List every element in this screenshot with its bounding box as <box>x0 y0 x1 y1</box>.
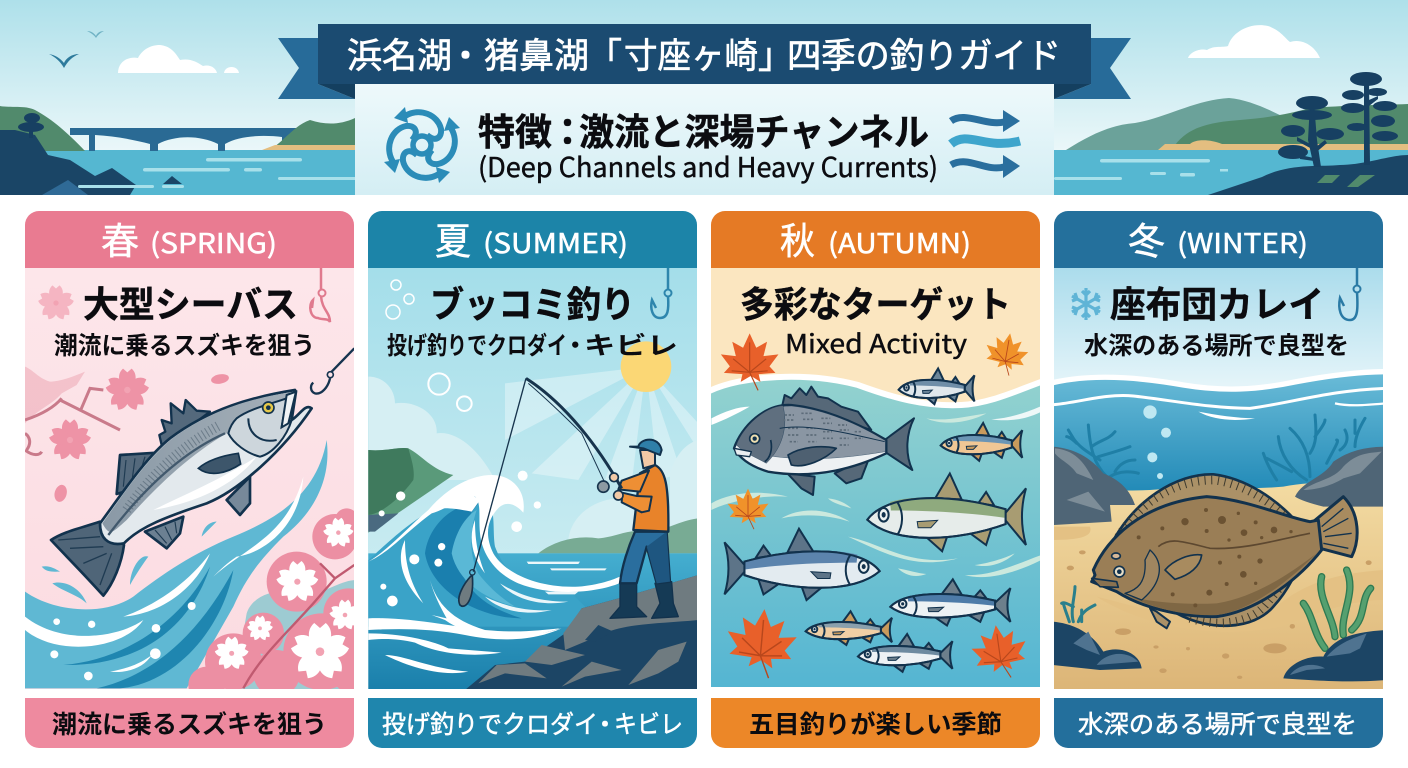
autumn footer <box>711 698 1040 748</box>
angler <box>610 440 678 618</box>
rock shore <box>465 575 698 690</box>
rock islet <box>163 176 182 184</box>
spring hook <box>310 268 330 322</box>
spring subtitle: 潮流に乗るスズキを狙う <box>54 327 315 362</box>
ribbon face <box>318 24 1091 84</box>
summer header: (SUMMER) <box>483 222 628 261</box>
autumn header: 秋 <box>780 211 815 265</box>
sand pebbles <box>1067 550 1372 679</box>
autumn water <box>708 377 1045 690</box>
ribbon tail right <box>1054 38 1131 99</box>
spring header: (SPRING) <box>150 222 277 261</box>
spring footer: 潮流に乗るスズキを狙う <box>52 705 327 741</box>
sand right <box>1158 140 1408 150</box>
winter water <box>1050 372 1387 497</box>
summer subtitle: ・ <box>563 327 588 362</box>
panel: summer <box>368 211 698 748</box>
sky <box>0 0 1408 150</box>
cloud right <box>1188 25 1320 58</box>
title text: 猪鼻湖 <box>484 28 589 79</box>
winter subtitle: 水深のある場所で良型を <box>1084 327 1349 362</box>
cloud left <box>118 45 239 73</box>
summer footer: キビレ <box>614 705 683 741</box>
rod, line and sinker <box>459 378 623 606</box>
summer subtitle: キビレ <box>584 327 678 362</box>
current streaks <box>711 406 1041 577</box>
winter header: 冬 <box>1128 211 1165 265</box>
water streaks left <box>78 158 358 188</box>
spring title: 大型シーバス <box>83 276 298 328</box>
water splash <box>25 440 327 688</box>
far hill right <box>1066 98 1300 150</box>
land patches <box>1317 175 1375 187</box>
blossom clusters <box>188 508 354 689</box>
sea bass <box>51 390 312 596</box>
feature subheading: (Deep Channels and Heavy Currents) <box>478 146 938 185</box>
panel: winter <box>1050 211 1387 748</box>
title text: 」 <box>758 28 793 79</box>
summer footer: 投げ釣りでクロダイ <box>382 705 598 741</box>
panel background <box>355 84 1054 195</box>
bubbles and streak <box>1143 405 1255 479</box>
sand shadows <box>1054 526 1383 588</box>
bird large <box>49 54 79 68</box>
bridge <box>70 128 305 151</box>
summer footer: ・ <box>592 705 618 741</box>
ribbon tail left <box>278 38 355 99</box>
summer footer <box>368 698 697 748</box>
winter footer <box>1054 698 1383 748</box>
bubbles <box>428 373 472 411</box>
feature heading: 激流と深場チャンネル <box>579 102 929 156</box>
hook eye <box>327 372 333 378</box>
panel: autumn <box>708 211 1045 748</box>
icon: sakura <box>37 285 75 321</box>
autumn title: 多彩なターゲット <box>740 276 1011 328</box>
title text: 寸座ヶ崎 <box>624 28 758 79</box>
front rocks <box>1053 622 1387 681</box>
sand left <box>262 145 355 150</box>
wave <box>368 471 623 673</box>
spring header: 春 <box>101 211 139 265</box>
seaweed <box>1062 570 1371 648</box>
summer hook eye <box>664 290 672 296</box>
right land <box>1208 155 1408 195</box>
summer subtitle: 投げ釣りでクロダイ <box>387 327 567 362</box>
small fish <box>724 368 1026 672</box>
left tree <box>18 113 44 138</box>
summer header: 夏 <box>435 211 471 265</box>
line and hook <box>311 348 354 394</box>
cherry branch <box>25 367 120 455</box>
sun and rays <box>505 341 698 483</box>
title text: ・ <box>448 28 483 79</box>
water streaks right <box>1054 159 1228 180</box>
winter illustration <box>1050 268 1387 690</box>
left rocks <box>0 130 136 195</box>
maple leaves <box>721 330 1031 682</box>
black seabream <box>734 387 914 495</box>
ribbon folds <box>318 84 1091 99</box>
spring hook eye <box>318 290 326 296</box>
icon: snowflake <box>1072 288 1100 320</box>
autumn header <box>711 211 1040 268</box>
winter hook eye <box>1354 286 1360 292</box>
icon: bubbles <box>386 280 414 319</box>
autumn subtitle: Mixed Activity <box>785 324 967 361</box>
pine trees <box>1278 72 1398 167</box>
bird small <box>87 31 104 38</box>
flounder <box>1092 474 1357 628</box>
small rock <box>42 180 88 195</box>
summer hook <box>651 268 668 318</box>
winter title: 座布団カレイ <box>1110 276 1324 328</box>
sea <box>368 553 698 690</box>
winter header: (WINTER) <box>1177 222 1308 261</box>
winter hook <box>1339 268 1357 320</box>
title text: 浜名湖 <box>347 28 452 79</box>
hills <box>368 448 698 553</box>
icon: swirl <box>384 107 460 183</box>
header scenery <box>0 0 1408 195</box>
autumn header: (AUTUMN) <box>828 222 971 261</box>
left hill <box>0 106 85 151</box>
summer header <box>368 211 697 268</box>
icon: current arrows <box>951 110 1020 178</box>
autumn footer: 五目釣りが楽しい季節 <box>749 705 1002 741</box>
title text: 「 <box>587 28 622 79</box>
feature heading: ： <box>549 102 586 156</box>
title ribbon <box>278 24 1131 99</box>
summer title: ブッコミ釣り <box>430 276 635 328</box>
feature panel <box>355 84 1054 195</box>
winter header <box>1054 211 1383 268</box>
spring illustration <box>25 268 377 703</box>
panel: spring <box>25 211 377 748</box>
blossoms and petals <box>48 369 230 503</box>
feature heading: 特徴 <box>478 102 552 156</box>
coral <box>1067 415 1365 480</box>
grey rocks <box>1053 447 1387 525</box>
surface waves <box>1050 372 1387 408</box>
summer illustration <box>368 268 698 690</box>
water <box>0 150 1408 195</box>
right headland <box>270 118 355 150</box>
spring footer <box>25 698 354 748</box>
sand <box>1050 482 1387 690</box>
autumn illustration <box>708 268 1045 690</box>
title text: 四季の釣りガイド <box>787 28 1061 79</box>
green hill right <box>1175 104 1408 146</box>
clouds <box>368 377 698 547</box>
winter footer: 水深のある場所で良型を <box>1078 705 1357 741</box>
spring header <box>25 211 354 268</box>
